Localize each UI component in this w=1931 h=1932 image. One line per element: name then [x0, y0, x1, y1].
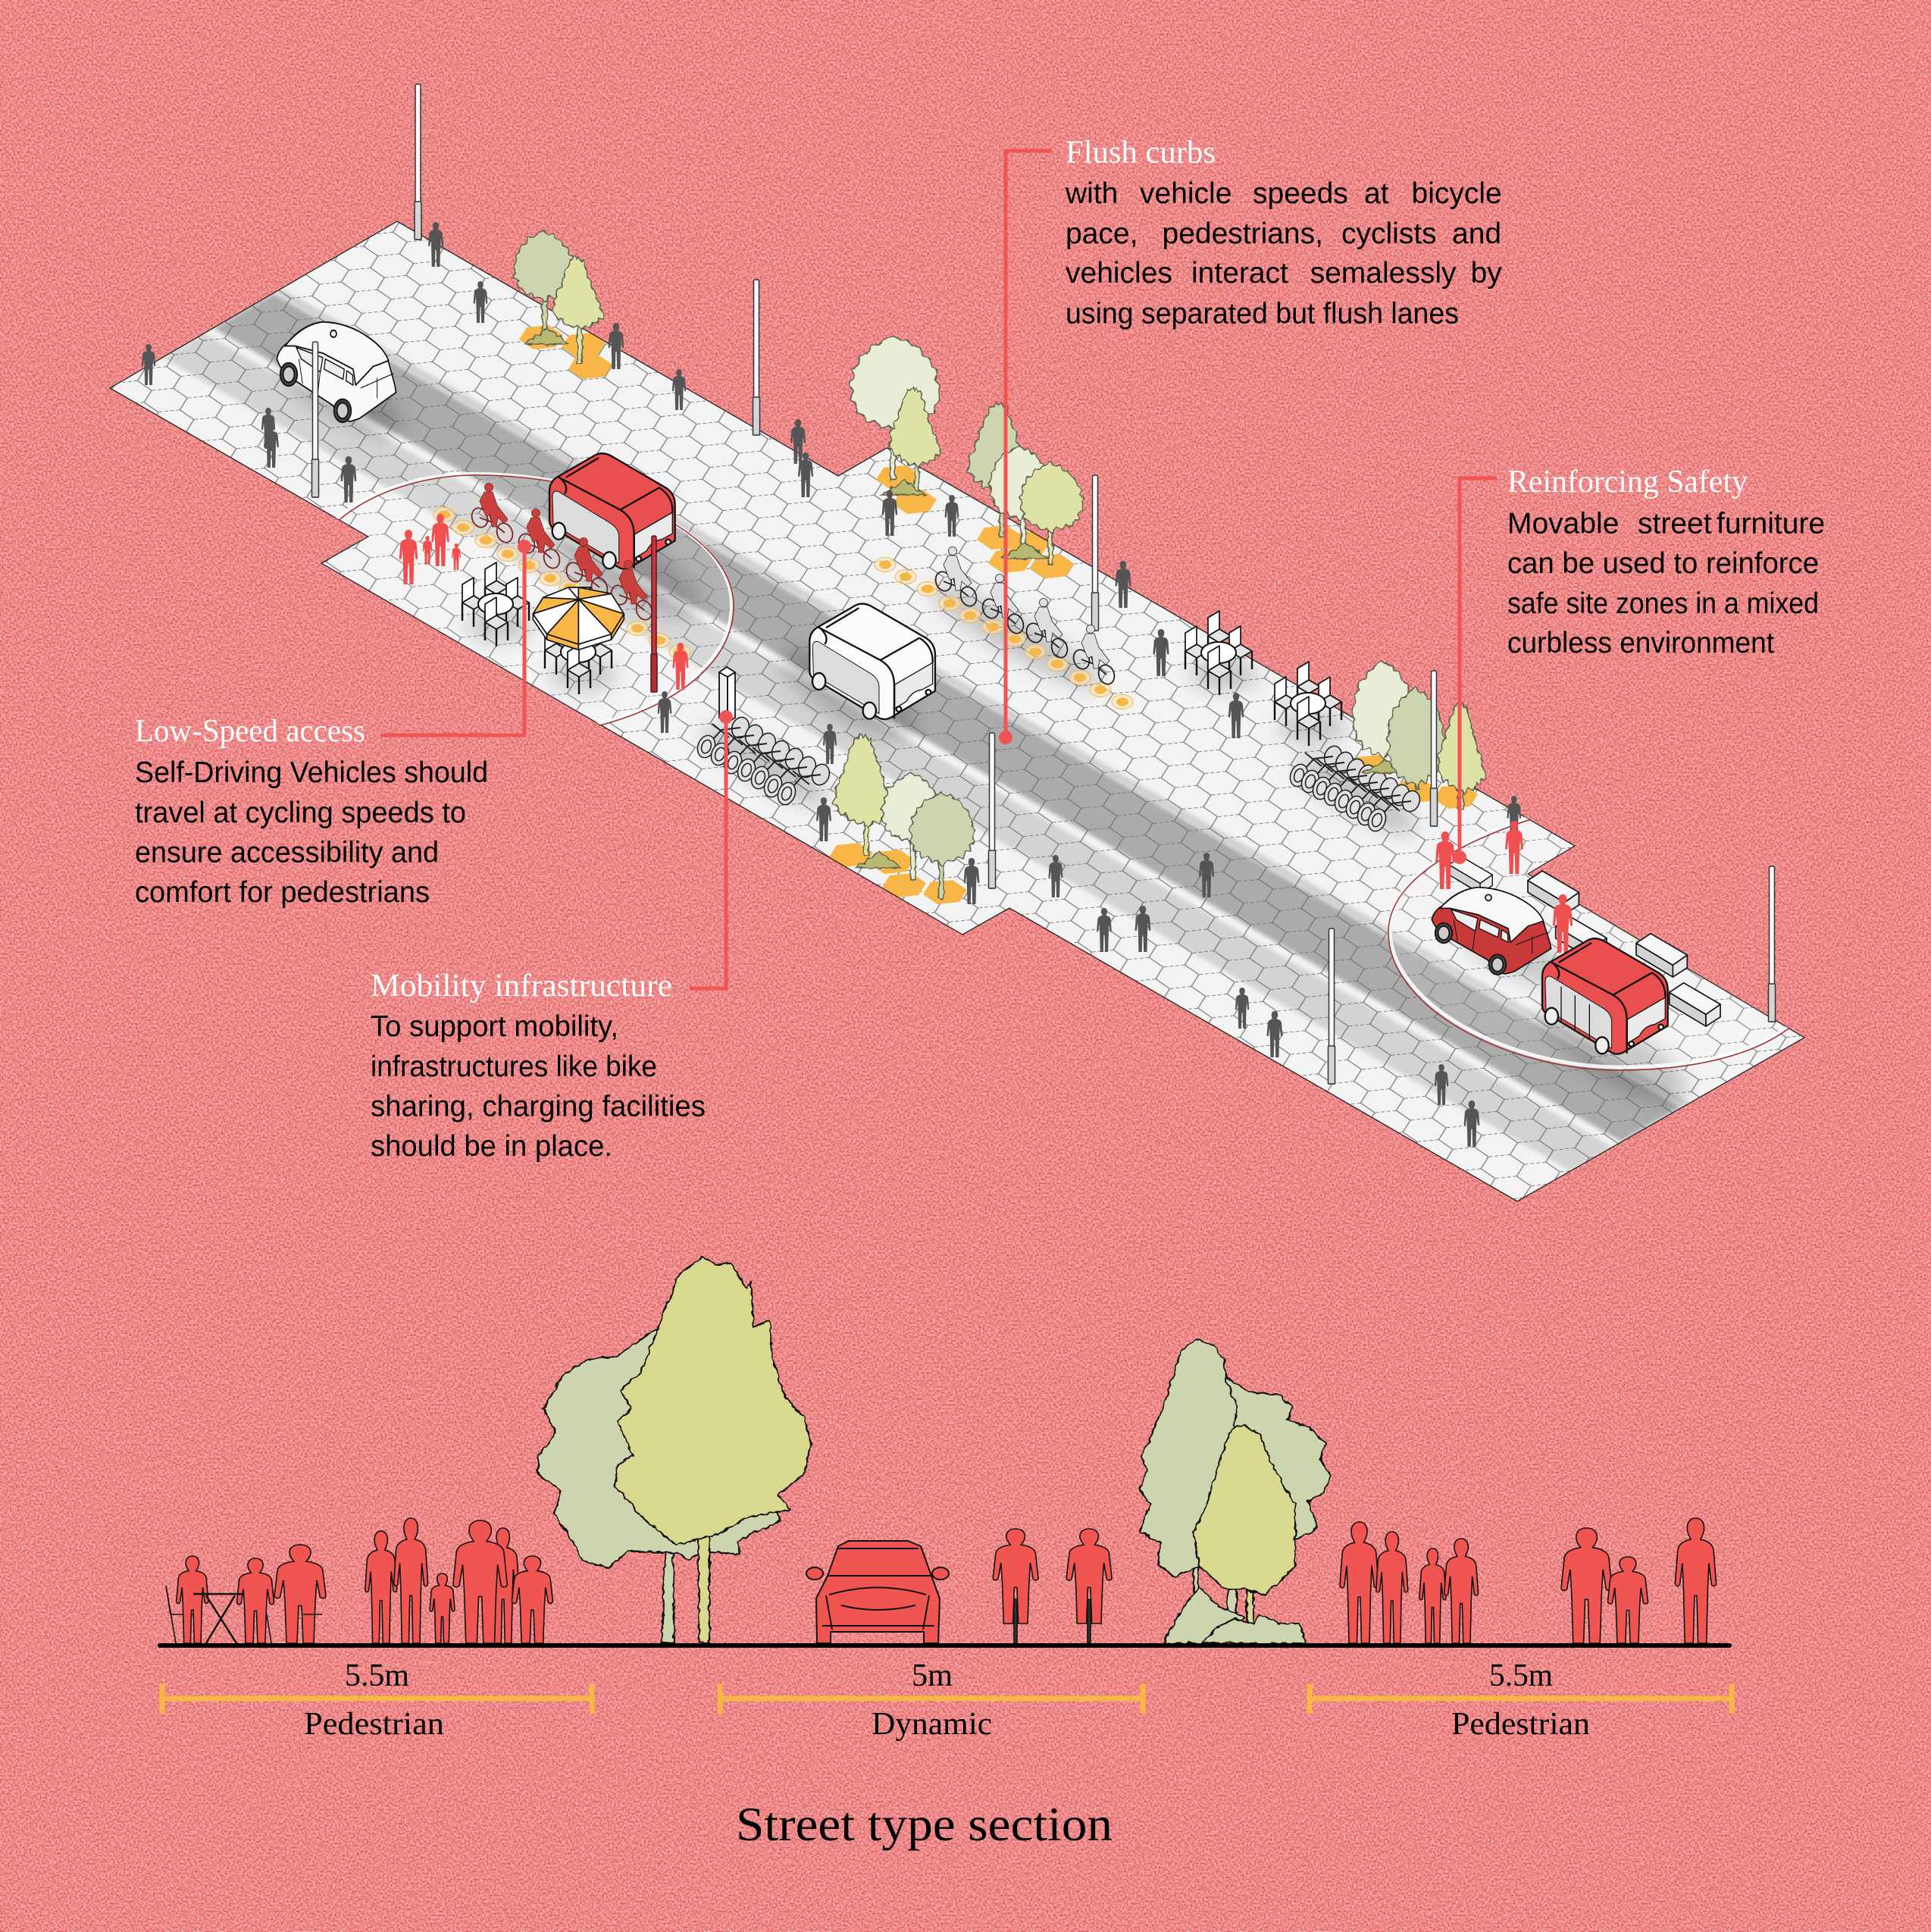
text block: mobility infrastructure — [371, 969, 706, 1163]
white autonomous car — [277, 322, 396, 422]
cafe table — [462, 562, 529, 647]
bike rack east — [1288, 744, 1422, 834]
text block: flush curbs: cyclists — [1341, 218, 1437, 250]
text block: flush curbs: using separated but flush lanes — [1066, 297, 1459, 330]
red autonomous car — [1432, 888, 1551, 975]
red pedestrians — [399, 514, 688, 690]
cafe table under umbrella — [545, 610, 612, 694]
text block: low-speed access — [135, 714, 488, 909]
dimension: left pedestrian: 5.5m — [345, 1658, 409, 1693]
text block: flush curbs: bicycle — [1411, 177, 1502, 210]
bike rack west — [695, 715, 832, 807]
movable street furniture benches — [1449, 856, 1720, 1026]
text block: flush curbs: at — [1364, 177, 1389, 210]
red cyclists — [469, 484, 655, 622]
dimension: right pedestrian: Pedestrian — [1451, 1707, 1590, 1742]
text block: reinforcing safety: street — [1638, 508, 1712, 540]
text block: flush curbs: vehicle — [1140, 177, 1232, 210]
section people: cafe group — [166, 1545, 326, 1643]
red pedestrians near benches — [1435, 821, 1573, 953]
leader: reinforcing safety — [1453, 478, 1497, 864]
isometric street plan — [109, 83, 1805, 1202]
bike station totem — [719, 667, 735, 722]
text block: flush curbs — [1065, 135, 1502, 330]
street surface — [110, 221, 1804, 1201]
text block: flush curbs: semalessly — [1310, 257, 1457, 290]
text block: low-speed access: Self-Driving Vehicles should — [135, 756, 488, 789]
text block: flush curbs: and — [1452, 218, 1501, 250]
dimension: right pedestrian: 5.5m — [1489, 1658, 1553, 1693]
text block: mobility infrastructure: infrastructures like bike — [371, 1051, 657, 1083]
leader: mobility infrastructure — [690, 710, 733, 988]
text block: mobility infrastructure: To support mobility, — [371, 1010, 618, 1043]
lamp post and pedestrian by car — [312, 342, 356, 503]
text block: flush curbs: pedestrians, — [1163, 218, 1323, 250]
text block: reinforcing safety: furniture — [1717, 508, 1825, 540]
street section drawing — [158, 1257, 1732, 1742]
trees: north group — [513, 231, 604, 363]
umbrella — [533, 587, 624, 650]
people in dark silhouette south — [658, 691, 1521, 1147]
text block: mobility infrastructure: Mobility infrastructure — [371, 969, 672, 1004]
text block: reinforcing safety: curbless environment — [1507, 627, 1774, 659]
lamp posts south — [988, 671, 1775, 1084]
white cyclists — [933, 547, 1117, 687]
text block: reinforcing safety: Movable — [1507, 508, 1619, 540]
dimension: left pedestrian: Pedestrian — [304, 1707, 444, 1742]
section tree: right group — [1140, 1339, 1331, 1643]
section cyclists — [993, 1529, 1112, 1643]
road bands — [163, 289, 1689, 1171]
ground line — [158, 1643, 1732, 1648]
text block: reinforcing safety: can be used to reinforce — [1507, 547, 1819, 580]
red shuttle east — [1542, 938, 1668, 1054]
text block: low-speed access: travel at cycling speeds to — [135, 797, 466, 829]
text block: flush curbs: pace, — [1066, 218, 1138, 250]
red shuttle — [549, 453, 675, 569]
lamp posts north — [415, 84, 1099, 631]
text block: low-speed access: comfort for pedestrians — [135, 876, 430, 909]
text block: reinforcing safety: Reinforcing Safety — [1507, 465, 1748, 499]
dimension: dynamic — [720, 1658, 1143, 1742]
dimension: right pedestrian — [1310, 1658, 1732, 1742]
trees: far east group — [1352, 661, 1486, 809]
cafe tables east — [1185, 611, 1341, 746]
text block: flush curbs: Flush curbs — [1066, 135, 1216, 170]
leader: low-speed access — [380, 540, 531, 735]
white shuttle — [809, 604, 935, 719]
red lamp post — [651, 536, 657, 692]
text block: reinforcing safety — [1507, 465, 1825, 659]
text block: flush curbs: interact — [1191, 257, 1288, 290]
trees: south group — [833, 734, 975, 898]
path dots — [433, 508, 1133, 709]
people in dark silhouette north — [142, 222, 1169, 676]
section people: family group — [365, 1518, 552, 1643]
safety zone: low-speed access — [334, 474, 734, 726]
soft shadows — [271, 340, 1700, 1119]
street outline — [110, 221, 1804, 1201]
text block: mobility infrastructure: should be in place. — [371, 1130, 612, 1163]
text block: flush curbs: by — [1471, 257, 1502, 290]
section people: right groups — [1340, 1518, 1716, 1643]
safety zone: reinforcing safety — [1388, 816, 1794, 1070]
leader: flush curbs — [999, 151, 1052, 744]
text block: mobility infrastructure: sharing, charging facilities — [371, 1090, 706, 1123]
section car — [806, 1541, 949, 1643]
text block: low-speed access: Low-Speed access — [135, 714, 365, 749]
trees: east group — [967, 402, 1084, 565]
title: Street type section — [736, 1798, 1113, 1851]
trees: centre group — [850, 336, 941, 495]
dimension: left pedestrian — [162, 1658, 592, 1742]
text block: flush curbs: with — [1065, 177, 1118, 210]
dimension: dynamic: Dynamic — [872, 1707, 992, 1742]
dimension: dynamic: 5m — [912, 1658, 953, 1693]
text block: flush curbs: speeds — [1253, 177, 1348, 210]
section tree: left pair — [538, 1257, 811, 1643]
text block: reinforcing safety: safe site zones in a mixed — [1507, 587, 1819, 620]
hexagonal paving — [112, 223, 1801, 1199]
text block: low-speed access: ensure accessibility and — [135, 837, 439, 869]
yellow planter hexes — [519, 325, 1478, 904]
text block: flush curbs: vehicles — [1066, 257, 1172, 290]
